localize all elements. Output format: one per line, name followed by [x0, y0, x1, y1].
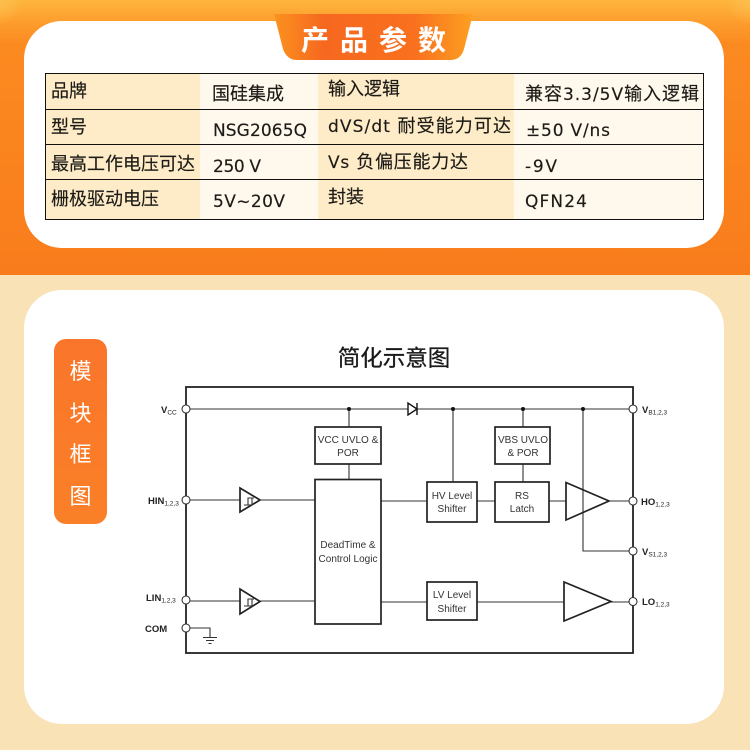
- block: VBS UVLO: VBS UVLO: [498, 435, 548, 446]
- diagram card: [24, 290, 724, 724]
- title tab: 产品参数: 数: [418, 19, 446, 59]
- diagram title: 简化示意图: [338, 341, 450, 373]
- side label: 模块框图: [54, 339, 107, 524]
- HIN input buffer: [240, 488, 260, 512]
- icon: diode: [408, 403, 417, 415]
- high side driver: [566, 482, 609, 520]
- low side driver: [564, 582, 611, 621]
- orange header background: [0, 0, 750, 275]
- block: LV level shifter: Shifter: [438, 604, 467, 615]
- block: dead time and control logic: DeadTime &: [320, 540, 376, 551]
- pin labels: LIN: [146, 593, 161, 604]
- pin labels: [145, 405, 670, 635]
- row 2: dVS/dt 耐受能力可达: [328, 116, 511, 137]
- row 2: 型号: [51, 117, 87, 138]
- row 2: [51, 116, 610, 141]
- title tab: 产品参数: 品: [340, 19, 368, 59]
- row 4: 封装: [328, 187, 364, 208]
- pin labels: 1,2,3: [164, 500, 179, 508]
- parameters card: [24, 21, 724, 248]
- pin labels: 1,2,3: [655, 502, 670, 508]
- row 4: [51, 187, 587, 212]
- row 1: 输入逻辑: [328, 79, 400, 100]
- row 4: QFN24: [525, 192, 587, 212]
- pin labels: LO: [642, 597, 655, 608]
- side label: 模块框图: 模: [69, 354, 92, 386]
- wiring: [186, 409, 633, 644]
- block: RS latch: Latch: [510, 504, 534, 515]
- LIN input buffer: [240, 589, 260, 614]
- row 2: NSG2065Q: [213, 121, 307, 141]
- row 1: 国硅集成: [212, 84, 284, 105]
- junction dots: [347, 407, 585, 411]
- pin labels: HIN: [148, 496, 164, 507]
- block: HV level shifter: [427, 482, 477, 522]
- side label: 模块框图: 块: [69, 396, 92, 428]
- row 1: 兼容3.3/5V输入逻辑: [525, 84, 699, 105]
- block: dead time and control logic: [315, 480, 381, 624]
- block: RS latch: RS: [515, 491, 529, 502]
- title tab: 产品参数: [274, 14, 473, 60]
- row 2: ±50 V/ns: [526, 121, 610, 141]
- block: LV level shifter: LV Level: [433, 590, 471, 601]
- block: HV level shifter: HV Level: [432, 491, 472, 502]
- block: dead time and control logic: Control Logic: [319, 554, 377, 565]
- side label: 模块框图: 图: [69, 479, 92, 511]
- block: VCC UVLO: POR: [337, 448, 359, 459]
- pins: [182, 405, 637, 632]
- pin labels: B1,2,3: [648, 410, 668, 416]
- title tab: 产品参数: 产: [301, 19, 329, 59]
- row 3: 最高工作电压可达: [51, 154, 195, 175]
- pin labels: V: [161, 405, 167, 416]
- row 1: 品牌: [51, 81, 87, 102]
- row 3: 250 V: [213, 157, 261, 177]
- row 4: 栅极驱动电压: [51, 189, 159, 210]
- block: VCC UVLO: VCC UVLO &: [318, 435, 379, 446]
- row 3: Vs 负偏压能力达: [328, 152, 468, 173]
- block: RS latch: [495, 482, 549, 522]
- chip outline: [186, 387, 633, 653]
- pin labels: CC: [167, 410, 177, 416]
- pin labels: 1,2,3: [655, 602, 670, 608]
- block: VCC UVLO: [315, 427, 381, 464]
- pin labels: COM: [145, 624, 167, 635]
- row 4: 5V~20V: [213, 192, 285, 212]
- block: VBS UVLO: [495, 427, 550, 464]
- side label: 模块框图: 框: [69, 437, 92, 469]
- row 3: [51, 152, 557, 177]
- pin labels: V: [642, 547, 648, 558]
- row 3: -9V: [525, 157, 557, 177]
- title tab: 产品参数: 参: [379, 19, 407, 59]
- block: VBS UVLO: & POR: [507, 448, 539, 459]
- row 1: [51, 79, 699, 105]
- pin labels: 1,2,3: [161, 598, 176, 604]
- pin labels: V: [642, 405, 648, 416]
- pin labels: S1,2,3: [648, 552, 668, 558]
- parameter table: [45, 74, 704, 220]
- block diagram: [145, 387, 670, 653]
- block: LV level shifter: [427, 582, 477, 620]
- pin labels: HO: [641, 497, 655, 508]
- block: HV level shifter: Shifter: [438, 504, 467, 515]
